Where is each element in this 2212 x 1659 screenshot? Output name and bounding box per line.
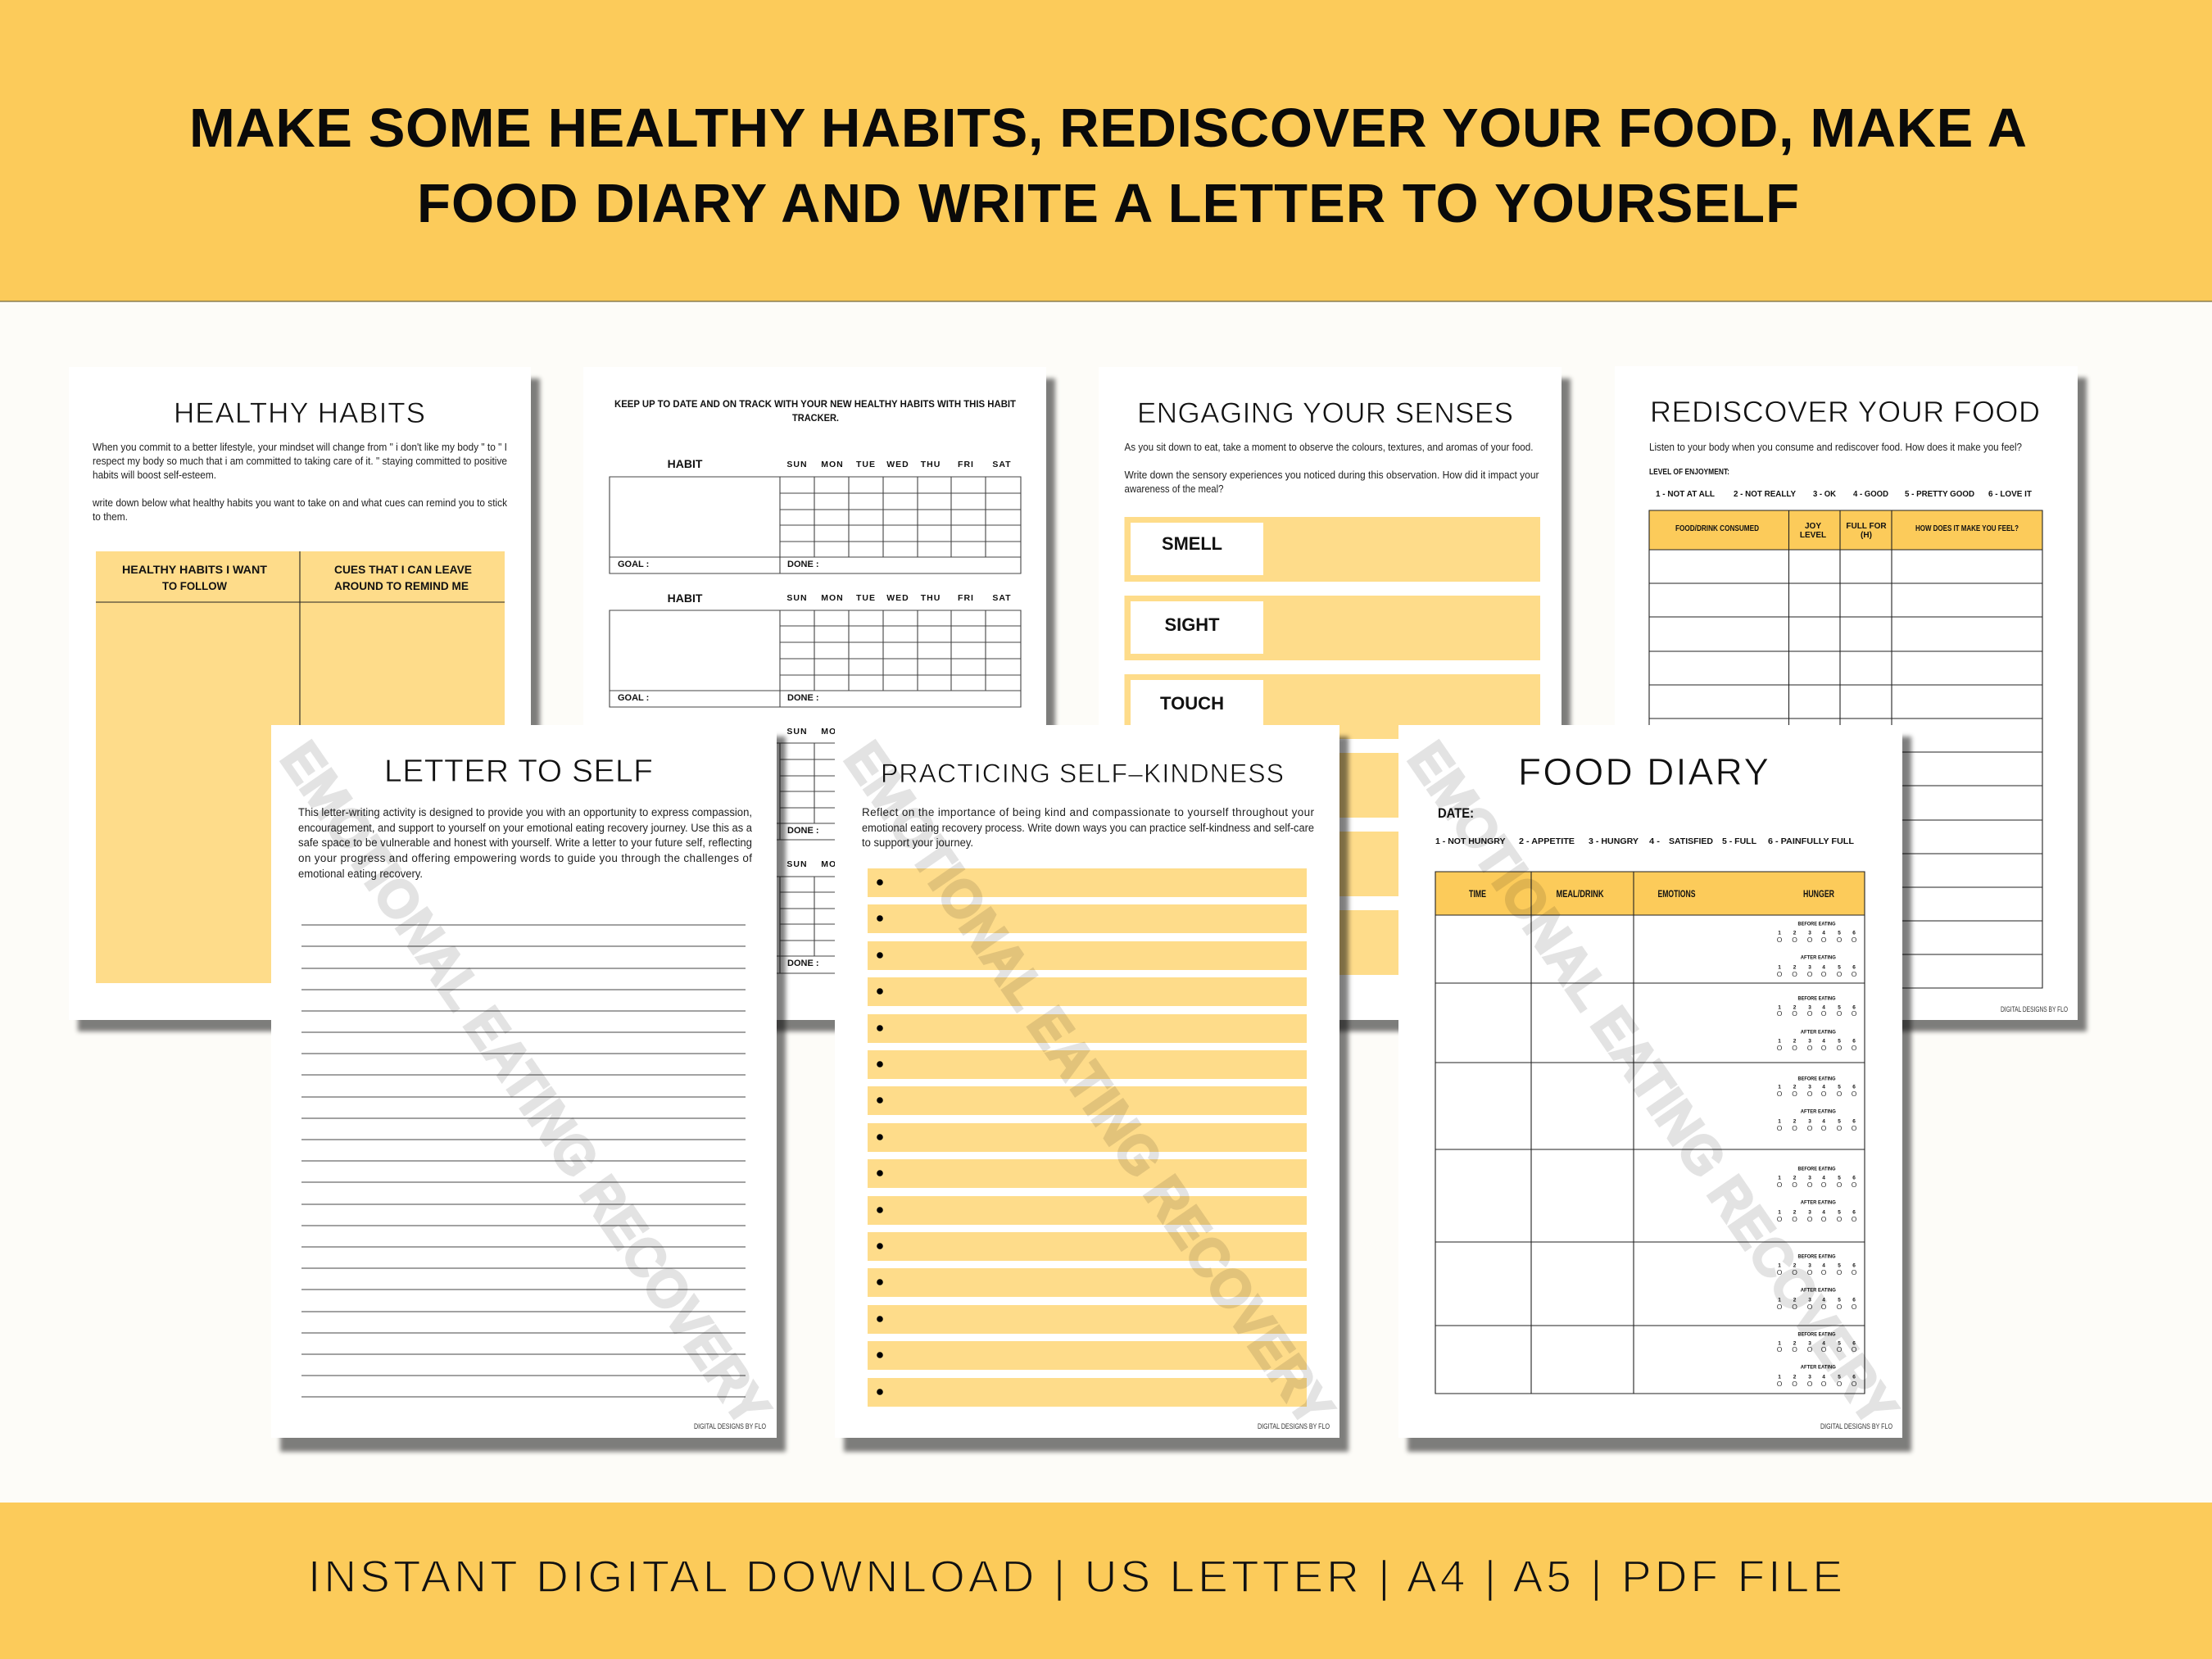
tracker instructions: [614, 398, 1017, 424]
food diary table: [1435, 872, 1865, 1394]
habits and cues table: TO FOLLOW: [162, 579, 228, 592]
habit tracker 4: [610, 859, 1021, 973]
enjoyment scale: [1649, 468, 2033, 499]
habit tracker 1: [610, 457, 1021, 573]
hunger ratings row 4: OOOOOO: [1777, 1215, 1857, 1223]
hunger ratings row 5: OOOOOO: [1777, 1303, 1857, 1311]
hunger ratings row 2: OOOOOO: [1777, 1044, 1857, 1052]
intro text: respect my body so much that i am committed to taking care of it. " staying committed to positive: [93, 456, 507, 467]
sense row: sight: SIGHT: [1165, 614, 1220, 635]
food enjoyment table: LEVEL: [1800, 531, 1826, 540]
hunger scale key: 2 - APPETITE: [1519, 836, 1575, 846]
hunger scale key: SATISFIED: [1669, 836, 1713, 846]
habit tracker 4: DONE :: [787, 959, 819, 968]
enjoyment scale: 1 - NOT AT ALL: [1656, 489, 1716, 499]
hunger ratings row 2: [1777, 996, 1857, 1052]
habit tracker 1: FRI: [958, 460, 974, 469]
tracker instructions: KEEP UP TO DATE AND ON TRACK WITH YOUR NEW HEALTHY HABITS WITH THIS HABIT: [614, 398, 1017, 410]
watermark: EMOTIONAL EATING RECOVERY: [833, 731, 1346, 1436]
intro text: write down below what healthy habits you want to take on and what cues can remind you to stick: [92, 497, 508, 509]
habit tracker 2: WED: [886, 593, 909, 603]
food diary table: HUNGER: [1803, 890, 1835, 900]
hunger ratings row 3: 123456: [1778, 1119, 1856, 1124]
rediscover instructions: Listen to your body when you consume and rediscover food. How does it make you feel?: [1649, 442, 2022, 453]
hunger ratings row 4: BEFORE EATING: [1797, 1167, 1835, 1172]
hunger ratings row 2: BEFORE EATING: [1797, 996, 1835, 1001]
tracker instructions: TRACKER.: [792, 412, 839, 424]
kindness instructions: to support your journey.: [862, 836, 973, 849]
habits and cues table: AROUND TO REMIND ME: [334, 579, 469, 592]
hunger ratings row 5: [1777, 1253, 1857, 1311]
title: [189, 97, 2027, 234]
sense row: smell: SMELL: [1162, 533, 1222, 554]
hunger ratings row 6: AFTER EATING: [1801, 1365, 1836, 1370]
panel: letter to self page: [270, 725, 782, 1438]
habit tracker 4: SUN: [786, 859, 808, 869]
bullets: [877, 879, 883, 1395]
food enjoyment table: HOW DOES IT MAKE YOU FEEL?: [1915, 524, 2019, 533]
habit tracker 3: MON: [821, 727, 844, 737]
hunger ratings row 1: 123456: [1778, 965, 1856, 970]
bullet bars: [868, 868, 1307, 1407]
hunger scale key: 1 - NOT HUNGRY: [1435, 836, 1506, 846]
hunger ratings row 6: 123456: [1778, 1375, 1856, 1380]
letter instructions: This letter-writing activity is designed to provide you with an opportunity to express compassion,: [298, 806, 752, 818]
hunger ratings row 1: AFTER EATING: [1801, 955, 1836, 960]
food enjoyment table: FOOD/DRINK CONSUMED: [1675, 524, 1759, 533]
hunger ratings row 5: OOOOOO: [1777, 1268, 1857, 1276]
hunger ratings row 2: 123456: [1778, 1039, 1856, 1044]
hunger ratings row 1: OOOOOO: [1777, 970, 1857, 978]
credit: DIGITAL DESIGNS BY FLO: [1258, 1422, 1330, 1430]
hunger scale key: 5 - FULL: [1722, 836, 1757, 846]
sense row: touch: TOUCH: [1160, 693, 1224, 714]
hunger ratings row 1: OOOOOO: [1777, 936, 1857, 944]
heading: letter to self: LETTER TO SELF: [384, 754, 653, 789]
hunger ratings row 5: 123456: [1778, 1298, 1856, 1303]
hunger ratings row 2: OOOOOO: [1777, 1009, 1857, 1018]
hunger ratings row 4: [1777, 1167, 1857, 1223]
heading: rediscover your food: REDISCOVER YOUR FOOD: [1650, 395, 2040, 428]
panel: food diary page: [1397, 725, 1910, 1438]
letter instructions: emotional eating recovery.: [298, 868, 423, 880]
date label: DATE:: [1438, 805, 1474, 821]
watermark: EMOTIONAL EATING RECOVERY: [270, 731, 782, 1436]
panel: habit tracker page: [583, 367, 1046, 1020]
panel: healthy habits page: [69, 367, 531, 1020]
hunger ratings row 3: OOOOOO: [1777, 1124, 1857, 1132]
hunger ratings row 2: 123456: [1778, 1004, 1856, 1011]
enjoyment scale: 5 - PRETTY GOOD: [1905, 489, 1974, 499]
title: MAKE SOME HEALTHY HABITS, REDISCOVER YOUR FOOD, MAKE A: [189, 97, 2027, 159]
intro text: When you commit to a better lifestyle, your mindset will change from " i don't like my body " to " I: [93, 442, 507, 453]
food enjoyment table: [1649, 510, 2042, 988]
hunger ratings row 3: OOOOOO: [1777, 1090, 1857, 1098]
hunger ratings row 1: 123456: [1778, 931, 1856, 936]
habit tracker 1: HABIT: [668, 457, 703, 470]
habit tracker 1: MON: [821, 460, 844, 469]
habit tracker 1: DONE :: [787, 560, 819, 569]
habit tracker 2: SUN: [786, 593, 808, 603]
enjoyment scale: 3 - OK: [1813, 489, 1836, 499]
panel: practicing self-kindness page: [833, 725, 1346, 1438]
enjoyment scale: 6 - LOVE IT: [1988, 489, 2033, 499]
intro text: [92, 442, 508, 523]
hunger ratings row 4: AFTER EATING: [1801, 1199, 1836, 1206]
footer text: INSTANT DIGITAL DOWNLOAD | US LETTER | A4 | A5 | PDF FILE: [308, 1551, 1843, 1602]
food enjoyment table: FULL FOR: [1846, 522, 1887, 531]
enjoyment scale: 4 - GOOD: [1853, 489, 1888, 499]
habit tracker 2: FRI: [958, 593, 974, 603]
hunger ratings row 2: AFTER EATING: [1801, 1029, 1836, 1036]
watermark: EMOTIONAL EATING RECOVERY: [1397, 731, 1910, 1436]
senses instructions: awareness of the meal?: [1124, 483, 1224, 495]
food enjoyment table: (H): [1861, 531, 1872, 540]
panel: rediscover your food page: [1615, 366, 2078, 1020]
habits and cues table: [96, 551, 505, 983]
hunger ratings row 3: 123456: [1778, 1085, 1856, 1090]
hunger ratings row 4: OOOOOO: [1777, 1181, 1857, 1189]
hunger ratings row 5: BEFORE EATING: [1797, 1253, 1835, 1260]
food diary table: EMOTIONS: [1658, 890, 1696, 900]
intro text: habits will boost self-esteem.: [93, 469, 216, 481]
hunger scale key: 4 -: [1649, 836, 1661, 846]
letter instructions: on your progress and offering empowering words to guide you through the challenges of: [298, 852, 752, 864]
letter instructions: [298, 806, 752, 880]
heading: practicing self-kindness: PRACTICING SELF–KINDNESS: [881, 759, 1284, 788]
letter instructions: safe space to be vulnerable and honest with yourself. Write a letter to your future self, reflecting: [298, 836, 752, 849]
writing lines: [301, 925, 746, 1397]
habit tracker 1: WED: [886, 460, 909, 469]
hunger ratings row 6: 123456: [1778, 1340, 1856, 1347]
habits and cues table: CUES THAT I CAN LEAVE: [334, 563, 472, 576]
sense row: touch: [1124, 674, 1540, 739]
hunger ratings row 3: BEFORE EATING: [1797, 1077, 1835, 1081]
habit tracker 2: TUE: [856, 593, 876, 603]
habit tracker 1: GOAL :: [618, 560, 649, 569]
habit tracker 2: HABIT: [668, 592, 703, 605]
habit tracker 1: TUE: [856, 460, 876, 469]
habit tracker 3: [610, 727, 1021, 840]
header band: [0, 0, 2212, 301]
food enjoyment table: JOY: [1805, 522, 1821, 531]
hunger ratings row 3: [1777, 1077, 1857, 1132]
hunger ratings row 6: OOOOOO: [1777, 1380, 1857, 1388]
habit tracker 3: DONE :: [787, 826, 819, 836]
kindness instructions: [862, 806, 1314, 849]
heading: engaging your senses: ENGAGING YOUR SENSES: [1137, 397, 1513, 429]
sense row: sight: [1124, 596, 1540, 660]
enjoyment scale: LEVEL OF ENJOYMENT:: [1649, 468, 1729, 477]
habit tracker 2: SAT: [992, 593, 1012, 603]
sense row: smell: [1124, 517, 1540, 582]
title: FOOD DIARY AND WRITE A LETTER TO YOURSELF: [417, 173, 1799, 234]
habit tracker 1: SAT: [992, 460, 1012, 469]
habit tracker 1: SUN: [786, 460, 808, 469]
habits and cues table: HEALTHY HABITS I WANT: [122, 563, 267, 576]
heading: food diary: FOOD DIARY: [1518, 750, 1769, 793]
habit tracker 4: MON: [821, 859, 844, 869]
hunger ratings row 4: 123456: [1778, 1209, 1856, 1216]
kindness instructions: Reflect on the importance of being kind and compassionate to yourself throughout your: [862, 806, 1314, 818]
food diary table: MEAL/DRINK: [1557, 890, 1604, 900]
habit tracker 2: [610, 592, 1021, 707]
letter instructions: encouragement, and support to yourself on your emotional eating recovery journey. Use this as a: [298, 822, 752, 834]
habit tracker 2: GOAL :: [618, 693, 649, 703]
hunger ratings row 1: BEFORE EATING: [1797, 921, 1835, 927]
credit: DIGITAL DESIGNS BY FLO: [694, 1422, 766, 1430]
intro text: to them.: [93, 511, 128, 523]
habit tracker 3: SUN: [786, 727, 808, 737]
hunger scale key: 3 - HUNGRY: [1589, 836, 1639, 846]
hunger ratings row 1: [1777, 921, 1857, 978]
hunger scale key: [1435, 836, 1855, 846]
hunger ratings row 5: AFTER EATING: [1801, 1288, 1836, 1293]
sense rows partly hidden: [1124, 753, 1540, 975]
food diary table: TIME: [1469, 890, 1486, 900]
hunger scale key: 6 - PAINFULLY FULL: [1768, 836, 1855, 846]
hunger ratings row 4: 123456: [1778, 1175, 1856, 1181]
credit: DIGITAL DESIGNS BY FLO: [2001, 1005, 2068, 1013]
footer band: [0, 1503, 2212, 1659]
senses instructions: Write down the sensory experiences you noticed during this observation. How did it impact your: [1124, 469, 1539, 481]
senses instructions: As you sit down to eat, take a moment to observe the colours, textures, and aromas of your food.: [1124, 442, 1534, 453]
enjoyment scale: 2 - NOT REALLY: [1734, 489, 1796, 499]
senses instructions: [1124, 442, 1539, 495]
habit tracker 1: THU: [921, 460, 941, 469]
hunger ratings row 5: 123456: [1778, 1263, 1856, 1268]
panel: engaging your senses page: [1099, 367, 1562, 1020]
hunger ratings row 6: [1777, 1332, 1857, 1388]
kindness instructions: emotional eating recovery process. Write down ways you can practice self-kindness and self-care: [862, 822, 1314, 834]
hunger ratings row 3: AFTER EATING: [1801, 1109, 1836, 1114]
heading: healthy habits: HEALTHY HABITS: [174, 397, 425, 429]
habit tracker 2: MON: [821, 593, 844, 603]
habit tracker 2: DONE :: [787, 693, 819, 703]
hunger ratings row 6: BEFORE EATING: [1797, 1332, 1835, 1337]
habit tracker 2: THU: [921, 593, 941, 603]
credit: DIGITAL DESIGNS BY FLO: [1820, 1422, 1892, 1430]
hunger ratings row 6: OOOOOO: [1777, 1345, 1857, 1353]
